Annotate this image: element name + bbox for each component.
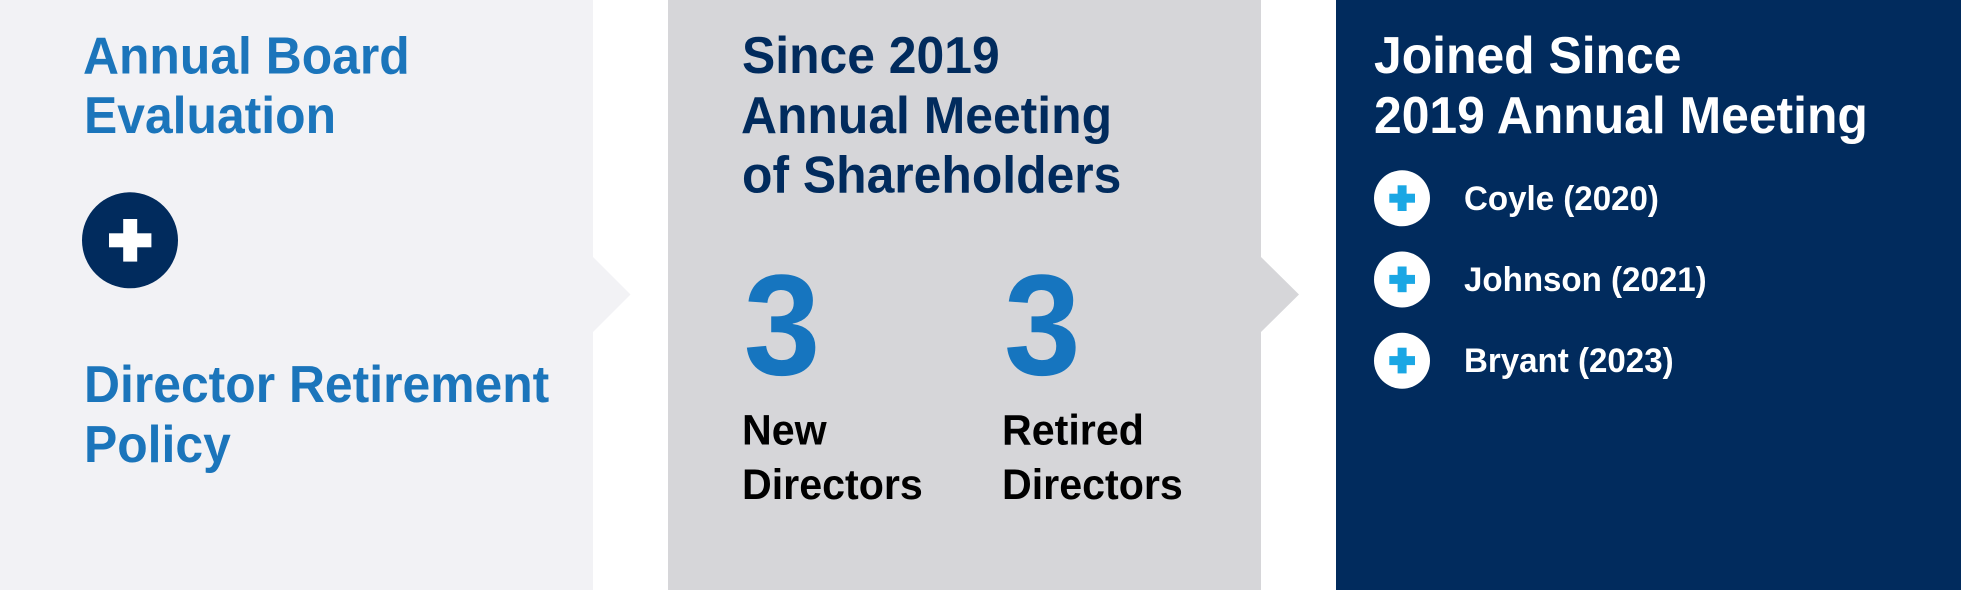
list item: Bryant <box>1374 333 1674 389</box>
panel: since 2019 annual meeting <box>668 0 1299 590</box>
heading: since 2019 annual meeting of shareholders: Annual Meeting <box>741 86 1112 144</box>
heading: annual board evaluation: Evaluation <box>84 86 336 144</box>
panel background with arrow <box>668 0 1299 590</box>
stat: 3 retired directors: Retired <box>1002 406 1144 454</box>
stat: 3 new directors: Directors <box>742 460 923 508</box>
list item: Johnson: Johnson (2021) <box>1464 260 1707 299</box>
panel: joined since 2019 annual meeting <box>1336 0 1961 590</box>
stat: 3 retired directors <box>1002 245 1183 508</box>
icon: plus in navy circle <box>82 192 178 288</box>
heading: joined since 2019 annual meeting: 2019 Annual Meeting <box>1374 86 1868 144</box>
heading: annual board evaluation <box>83 27 410 144</box>
panel background <box>1336 0 1961 590</box>
heading: since 2019 annual meeting of shareholders <box>741 26 1121 204</box>
stat: 3 retired directors: Directors <box>1002 460 1183 508</box>
stat: 3 new directors: New <box>742 406 827 454</box>
panel: board evaluation and retirement policy <box>0 0 630 590</box>
heading: director retirement policy: Policy <box>84 415 231 473</box>
heading: director retirement policy <box>84 355 549 473</box>
stat: 3 new directors: 3 <box>744 245 820 405</box>
stat: 3 retired directors: 3 <box>1004 245 1081 405</box>
stat: 3 new directors <box>742 245 923 508</box>
list item: Coyle: Coyle (2020) <box>1464 179 1659 218</box>
panel background with arrow <box>0 0 630 590</box>
heading: director retirement policy: Director Retirement <box>84 355 549 413</box>
heading: since 2019 annual meeting of shareholders: Since 2019 <box>742 26 1000 84</box>
heading: since 2019 annual meeting of shareholders: of Shareholders <box>742 146 1121 204</box>
heading: annual board evaluation: Annual Board <box>83 27 410 85</box>
list item: Bryant: Bryant (2023) <box>1464 341 1674 380</box>
list item: Coyle <box>1374 170 1659 226</box>
list item: Johnson <box>1374 252 1707 308</box>
heading: joined since 2019 annual meeting <box>1374 26 1868 144</box>
heading: joined since 2019 annual meeting: Joined Since <box>1374 26 1681 84</box>
